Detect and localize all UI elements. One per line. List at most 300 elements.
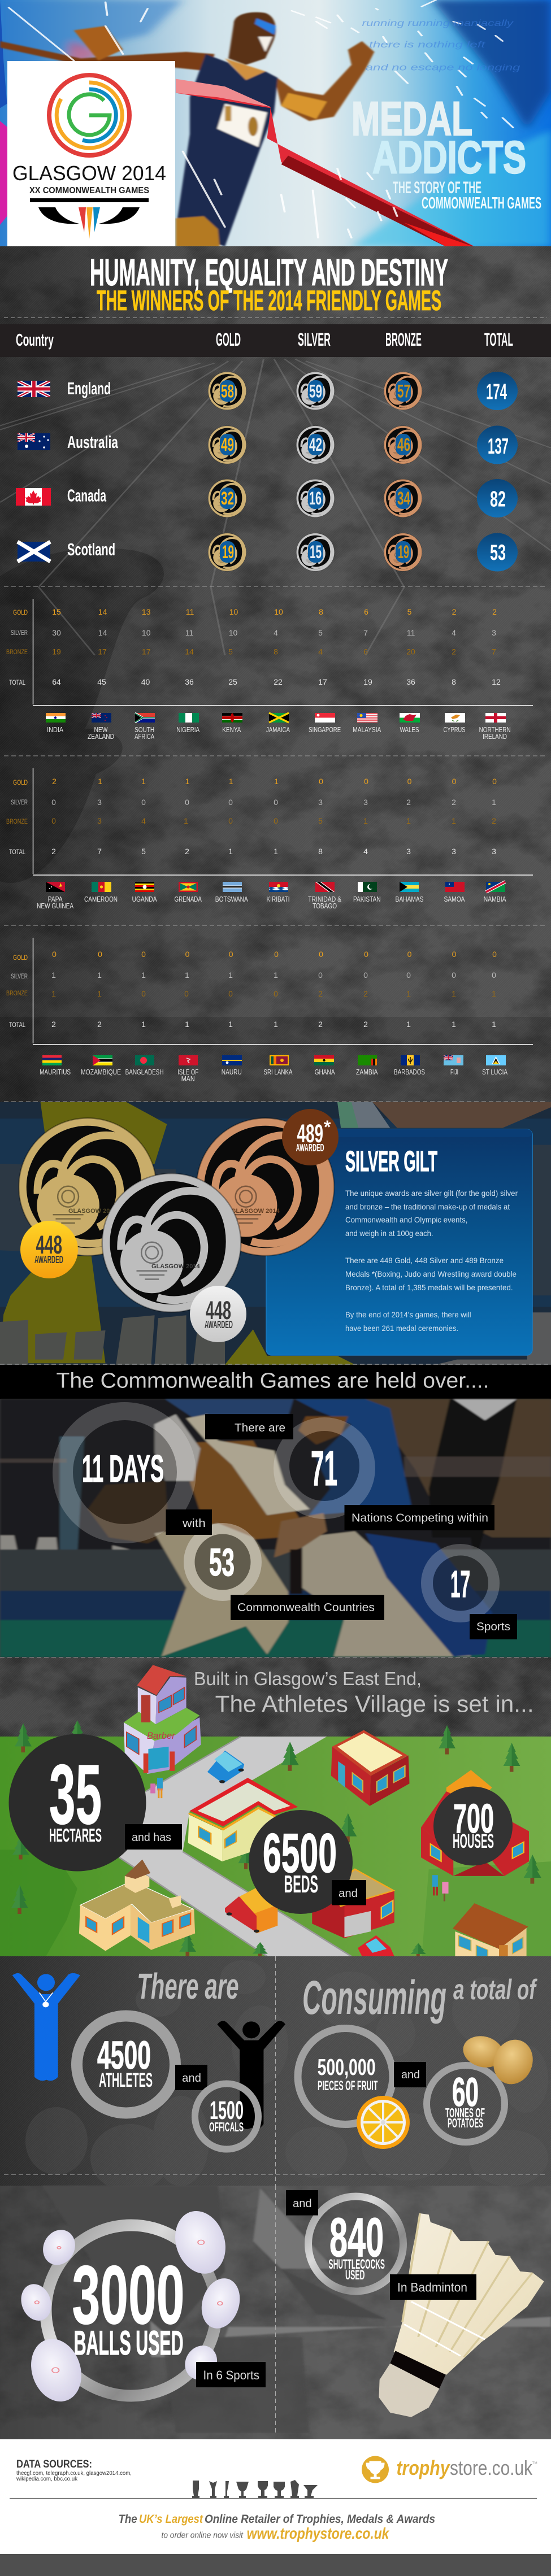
silver values: 7 [363,628,368,637]
total values: 25 [228,677,237,686]
country names: SAMOA [444,895,465,903]
row: England: 58 [221,381,234,401]
total values: 1 [452,1020,456,1029]
country names: NORTHERN [479,726,511,734]
stat: 700 houses [433,1786,513,1865]
row labels: GOLD [13,780,28,786]
stat ring: 60 tonnes of potatoes [427,2065,505,2142]
cream house [188,1778,298,1861]
row: England: 59 [309,381,322,401]
total values: 1 [492,1020,496,1029]
silver values: 3 [363,798,368,807]
gold values: 0 [364,950,368,959]
row labels: TOTAL [9,680,25,686]
gold values: 13 [142,607,151,616]
total values: 12 [492,677,501,686]
total values: 2 [51,847,56,856]
panel: medals section [0,1102,551,1365]
caption: in badminton: In Badminton [397,2280,467,2294]
silver values: 3 [97,798,102,807]
gold values: 8 [319,607,323,616]
bronze values: 4 [318,647,323,656]
stat ring: 1500 officials [195,2083,258,2149]
country names [47,726,511,741]
row labels: TOTAL [9,1022,25,1029]
row: Scotland: Scotland [67,539,115,559]
barber shop: Barber [147,1731,175,1741]
row: Scotland: 53 [490,541,506,565]
bronze badge: 489 awarded [282,1109,339,1165]
row: Canada: 32 [221,488,234,508]
caption: and has: and has [132,1831,171,1844]
icon: orange slice [357,2096,410,2149]
country names: MOZAMBIQUE [81,1068,121,1076]
country names: NAURU [222,1068,242,1076]
table: third tier nations [6,768,533,910]
ring: 3000 balls used: BALLS USED [74,2324,184,2362]
table header bar: GOLD [216,329,241,350]
gold badge: 448 awarded [20,1221,78,1278]
table: second tier nations [6,599,533,741]
bronze values: 2 [318,989,323,998]
panel heading: SILVER GILT [345,1145,437,1177]
gold values: 15 [52,607,61,616]
caption: and [394,2062,426,2087]
row: Australia: 49 [221,434,234,455]
trophystore logo: store.co.uk [450,2456,533,2479]
panel body text: and weigh in at 100g each. [345,1229,433,1238]
row: England: 174 [486,380,507,404]
gold values: 6 [364,607,368,616]
country names: PAPA [48,895,63,903]
silver values: 0 [452,971,456,980]
gold values: 0 [364,777,368,786]
stat ring: 4500 athletes: 4500 [97,2033,151,2077]
table header bar [0,324,551,357]
stat: 35 hectares: HECTARES [49,1825,102,1846]
panel body text [345,1189,518,1333]
trophystore logo: trophy [397,2456,450,2479]
ring: 3000 balls used [46,2225,216,2396]
bronze values [51,816,496,825]
panel: people and food [0,1956,551,2192]
call to action: www.trophystore.co.uk [247,2525,390,2542]
country names: ZAMBIA [356,1068,378,1076]
stat ring: 1500 officials: 1500 [210,2096,244,2125]
bronze values: 5 [228,647,233,656]
bronze values: 8 [274,647,278,656]
country names: MALAYSIA [353,726,381,734]
caption: and [332,1880,366,1905]
trophystore logo: TM [532,2462,537,2465]
bronze badge: 489 awarded: 489 [297,1119,323,1148]
silver medal: GLASGOW 2014 [151,1263,200,1270]
country names: NAMBIA [484,895,506,903]
silver values: 5 [318,628,323,637]
bronze values: 0 [141,989,146,998]
row: England [18,372,518,410]
call to action [162,2525,390,2542]
total values: 1 [228,1020,233,1029]
country names: PAKISTAN [353,895,381,903]
country flags [46,713,506,723]
tagline: UK’s Largest [139,2513,203,2526]
total values: 4 [363,847,368,856]
caption: there are: There are [235,1422,285,1434]
row labels: SILVER [11,973,28,980]
stat ring: 53 countries [184,1523,262,1601]
white-suited judoka [88,1399,471,1656]
row: Canada: 16 [309,488,322,508]
script text overlay: there is nothing left [369,40,486,50]
gold values: 10 [229,607,238,616]
script text overlay: running running maniacally [362,19,514,28]
gold values: 5 [407,607,412,616]
table header bar: SILVER [298,329,331,350]
gold values: 1 [141,777,146,786]
country names: CYPRUS [443,726,466,734]
stat ring: 500,000 pieces of fruit [298,2028,393,2124]
bronze values: 1 [97,989,102,998]
total values: 17 [318,677,327,686]
caption: commonwealth countries: Commonwealth Countries [237,1602,375,1614]
gold values: 0 [141,950,146,959]
stat ring: 11 days: 11 DAYS [82,1447,164,1490]
icon: athlete with medal [12,1973,80,2081]
panel: hero banner [0,0,551,247]
trophy silhouettes [192,2480,318,2498]
bronze values: 0 [228,816,233,825]
ring: 840 shuttlecocks: 840 [329,2207,384,2268]
gold values: 0 [319,950,323,959]
footer [0,2439,551,2554]
panel body text: Commonwealth and Olympic events, [345,1215,468,1224]
country names: NEW [94,726,108,734]
bronze values: 20 [406,647,415,656]
stat: 35 hectares: 35 [49,1747,102,1842]
silver medal [102,1173,241,1312]
row labels: TOTAL [9,849,25,856]
total values: 1 [406,1020,411,1029]
stat: 700 houses: HOUSES [453,1830,494,1852]
data sources: wikipedia.com, bbc.co.uk [16,2475,78,2482]
row: Australia: 42 [309,434,322,455]
gold values: 14 [98,607,107,616]
gold values: 0 [492,950,497,959]
icon: potatoes [459,2032,539,2090]
silver values [51,798,496,807]
bronze medal [197,1118,334,1256]
heading: athletes village [194,1668,534,1717]
gold values: 0 [229,950,233,959]
stat ring: 1500 officials: OFFICALS [209,2120,244,2134]
total values [52,677,501,686]
total values: 5 [141,847,146,856]
bronze values [52,647,496,656]
caption: with: with [182,1517,206,1530]
panel: balls and shuttlecocks [0,2186,551,2439]
gold values: 0 [185,950,190,959]
gold medal [19,1118,157,1256]
gold values: 2 [52,777,57,786]
bronze medal: GLASGOW 2014 [231,1208,280,1215]
table header bar: TOTAL [484,329,513,350]
bronze values: 19 [52,647,61,656]
ring: 840 shuttlecocks: USED [345,2268,365,2283]
table: fourth tier nations [6,938,533,1083]
silver values: 0 [228,798,233,807]
caption: and [175,2065,207,2090]
total values: 7 [97,847,102,856]
total values: 2 [363,1020,368,1029]
red garage [312,1869,394,1938]
gold values: 11 [186,607,194,616]
caption: in 6 sports [196,2362,266,2387]
information panel [266,1129,532,1355]
row labels: SILVER [11,799,28,806]
bronze values: 0 [51,816,56,825]
tan house [79,1860,195,1951]
village illustration [0,1665,551,1957]
caption: and: and [182,2072,201,2085]
country names [40,1068,508,1083]
row labels [6,610,28,686]
pedestrians [150,1778,449,1901]
silver values: 1 [51,971,56,980]
silver values: 0 [492,971,496,980]
stat ring: 71 nations: 71 [311,1441,337,1496]
silver values: 0 [185,798,189,807]
gold values: 0 [274,950,279,959]
stat ring: 60 tonnes of potatoes: POTATOES [448,2116,483,2130]
gold badge: 448 awarded: 448 [36,1230,62,1259]
gold values: 0 [98,950,102,959]
delivery van [225,1887,277,1933]
country names: BARBADOS [394,1068,425,1076]
athlete figure [0,12,374,247]
road [106,1737,352,1956]
total values: 3 [452,847,456,856]
panel: judo photo [0,1399,551,1657]
script text overlay: and no escape no longing [366,63,520,72]
icon: shuttlecock [379,2213,544,2417]
gold values [52,607,497,616]
country names: ZEALAND [88,733,114,741]
caption: and: and [401,2069,420,2081]
stat ring: 60 tonnes of potatoes: 60 [452,2070,479,2115]
row: Australia: 46 [397,434,410,455]
total values: 3 [406,847,411,856]
country names: SRI LANKA [263,1068,293,1076]
total values: 8 [452,677,456,686]
silver values: 1 [274,971,278,980]
bronze values: 17 [142,647,151,656]
country names: UGANDA [132,895,157,903]
country names: BAHAMAS [396,895,424,903]
row labels: GOLD [13,955,28,961]
country names: TRINIDAD & [308,895,342,903]
silver values: 0 [363,971,368,980]
Glasgow 2014 logo: XX COMMONWEALTH GAMES [29,186,149,195]
total values: 1 [185,1020,189,1029]
pebble pattern [25,1960,548,2192]
gold values: 1 [229,777,233,786]
row: Scotland: 19 [398,542,409,562]
silver values: 1 [228,971,233,980]
tagline: The [119,2513,137,2526]
country names: GHANA [315,1068,335,1076]
bronze values: 4 [141,816,146,825]
silver values: 2 [406,798,411,807]
bronze values: 2 [452,647,456,656]
bronze values: 1 [452,989,456,998]
country names: IRELAND [483,733,507,741]
blue-suited judoka [274,1399,492,1656]
panel body text: The unique awards are silver gilt (for the gold) silver [345,1189,518,1198]
caption: in badminton [390,2274,476,2300]
silver values: 0 [51,798,56,807]
stat ring: 17 sports: 17 [450,1563,470,1605]
gold values: 0 [319,777,323,786]
bronze values: 6 [363,647,368,656]
silver values: 30 [52,628,61,637]
country names: CAMEROON [84,895,118,903]
country names [37,895,506,910]
country flags [46,882,505,892]
stat: 6500 beds: BEDS [284,1870,318,1898]
bronze values: 1 [51,989,56,998]
panel: medal table background [0,246,551,1102]
gold values: 0 [407,950,412,959]
gold values: 1 [274,777,279,786]
silver values: 2 [452,798,456,807]
stat: 700 houses: 700 [453,1796,494,1842]
running track lines [0,359,551,655]
trophystore logo [362,2456,537,2483]
stat ring: 11 days [53,1402,196,1543]
silver values: 14 [98,628,107,637]
bronze values: 0 [184,989,189,998]
bronze values: 1 [363,816,368,825]
stat ring: 17 sports [421,1544,500,1622]
tagline [119,2513,435,2526]
gold values [52,777,497,786]
tagline: Online Retailer of Trophies, Medals & Awards [205,2513,435,2526]
caption: sports: Sports [476,1621,510,1633]
total values: 2 [185,847,189,856]
country names: NEW GUINEA [37,902,74,910]
heading band: the Commonwealth Games are held over: The Commonwealth Games are held over.... [57,1369,489,1393]
gold values: 0 [452,777,457,786]
gold values: 0 [492,777,497,786]
medals photo background [0,1102,551,1365]
row: Canada: Canada [67,486,106,505]
heading: athletes village: The Athletes Village is set in... [215,1690,534,1717]
row: England: 57 [397,381,410,401]
row labels: BRONZE [6,990,28,997]
silver values: 1 [97,971,102,980]
bronze values: 1 [184,816,188,825]
country names: BOTSWANA [215,895,248,903]
panel body text: There are 448 Gold, 448 Silver and 489 Bronze [345,1256,504,1265]
bronze values: 0 [274,816,278,825]
silver values: 10 [229,628,237,637]
finish ribbon [176,79,475,247]
country names: SINGAPORE [309,726,341,734]
row labels: BRONZE [6,819,28,825]
row labels: GOLD [13,610,28,616]
ring: 840 shuttlecocks: SHUTTLECOCKS [329,2257,385,2272]
red house [331,1730,410,1806]
panel body text: Bronze). A total of 1,385 medals will be presented. [345,1283,513,1292]
row: Scotland: 19 [222,542,234,562]
caption: and [286,2190,318,2216]
caption: there are [205,1414,293,1439]
silver badge: 448 awarded: 448 [206,1296,231,1325]
bronze values: 0 [274,989,278,998]
icon: white balls [18,2209,244,2404]
data sources [16,2458,132,2482]
gold badge: 448 awarded: AWARDED [34,1254,63,1265]
panel body text: have been 261 medal ceremonies. [345,1324,458,1333]
bronze values: 0 [228,989,233,998]
firework sparks [9,0,513,238]
silver values: 3 [492,628,496,637]
heading: Humanity, Equality and Destiny [90,251,448,316]
silver values: 11 [407,628,415,637]
total values: 1 [274,847,278,856]
country names: ISLE OF [177,1068,198,1076]
silver values: 4 [452,628,456,637]
country names: KIRIBATI [267,895,289,903]
blue car [207,1751,244,1783]
country names: TOBAGO [313,902,337,910]
row: Scotland: 15 [310,542,322,562]
country names: KENYA [222,726,241,734]
script text overlay [362,19,520,72]
country names: INDIA [47,726,64,734]
silver values: 3 [318,798,323,807]
ring: 3000 balls used: 3000 [72,2249,184,2342]
row labels: BRONZE [6,649,28,656]
caption: nations competing within: Nations Competing within [352,1512,488,1525]
stat: 35 hectares [9,1734,146,1871]
Glasgow 2014 logo [7,61,175,246]
total values: 19 [363,677,372,686]
caption: nations competing within [345,1505,494,1530]
heading: athletes village: Built in Glasgow’s East End, [194,1668,422,1689]
total values: 2 [97,1020,102,1029]
country names: MAN [181,1075,195,1083]
country names: WALES [400,726,419,734]
row labels: SILVER [11,630,28,637]
total values: 22 [274,677,283,686]
total values: 2 [318,1020,323,1029]
bronze values: 1 [406,816,411,825]
table header bar: Country [16,330,54,350]
gold values: 0 [52,950,57,959]
call to action: to order online now visit [162,2531,244,2540]
heading band: the Commonwealth Games are held over [0,1365,551,1399]
silver values [51,971,496,980]
total values [51,847,496,856]
ring: 840 shuttlecocks [309,2196,404,2291]
bronze values: 5 [318,816,323,825]
hero title [352,92,541,212]
hero title: MEDAL [352,92,472,145]
panel body text: and bronze – the traditional make-up of medals at [345,1202,510,1211]
row: Canada: 34 [397,488,410,508]
